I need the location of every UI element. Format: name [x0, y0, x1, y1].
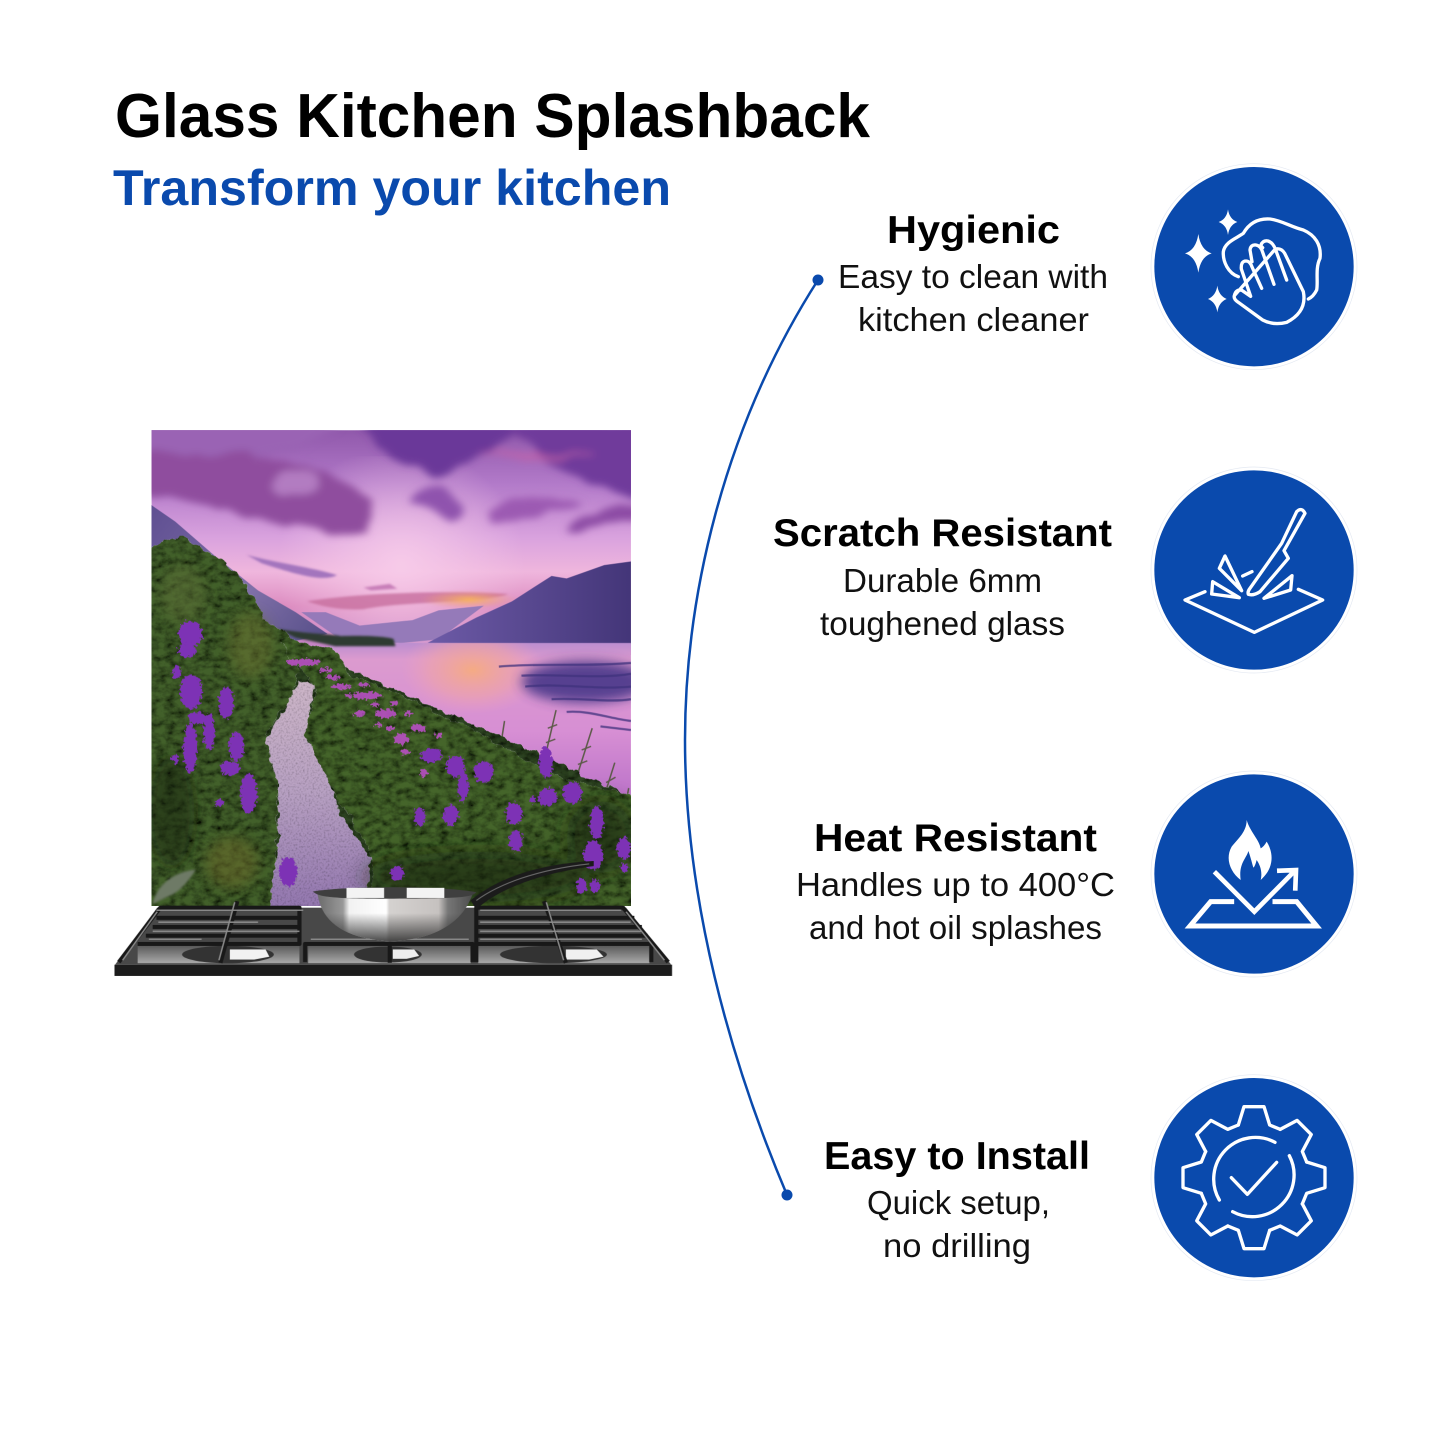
small pink flowers along the bank: [286, 659, 442, 778]
feature: Scratch Resistant: [773, 512, 1112, 642]
icon: gear with check mark: [1151, 1075, 1357, 1281]
foliage base: [266, 664, 628, 888]
large purple flower spikes: [172, 621, 631, 894]
heading: Scratch Resistant: [773, 512, 1112, 555]
foliage left of the path: [152, 536, 300, 906]
stems against the water: [501, 710, 630, 794]
description: [867, 1184, 1050, 1264]
frying pan: [313, 861, 594, 941]
grate highlights: [123, 902, 664, 960]
description: [838, 258, 1108, 338]
description: kitchen cleaner: [858, 301, 1089, 338]
description: Quick setup,: [867, 1184, 1050, 1221]
pale leaf bottom left: [153, 870, 196, 904]
description: Handles up to 400°C: [796, 866, 1115, 903]
shadows on right bank: [363, 801, 634, 902]
clouds: [134, 420, 649, 532]
subtitle: Transform your kitchen: [113, 160, 671, 216]
pan handle: [471, 861, 594, 910]
description: no drilling: [883, 1227, 1031, 1264]
thin horizon clouds: [247, 555, 521, 610]
splashback photo: lakeside sunset: [152, 430, 631, 906]
pan body: [318, 894, 473, 941]
description: [820, 562, 1065, 642]
gravel path: [266, 681, 371, 935]
feature: Easy to Install: [824, 1135, 1090, 1264]
hob surface: [115, 908, 671, 965]
front edge: [114, 965, 672, 976]
product image: splashback and gas hob: [114, 420, 672, 976]
rim reflections: [346, 888, 444, 898]
description: Easy to clean with: [838, 258, 1108, 295]
feature: Hygienic: [838, 209, 1108, 338]
icon: flame and arrow: [1151, 771, 1357, 977]
title: Glass Kitchen Splashback: [115, 82, 870, 151]
gas hob: [114, 901, 672, 976]
icon: cleaning hand: [1151, 164, 1357, 370]
mountains: [152, 505, 631, 645]
water ripples: [499, 663, 631, 730]
tree line on far shore: [277, 628, 395, 646]
olive and shadow patches: [152, 562, 276, 891]
heading: Hygienic: [887, 209, 1060, 252]
description: and hot oil splashes: [809, 909, 1102, 946]
icon: knife on glass: [1151, 467, 1357, 673]
foliage right of the path: [280, 637, 631, 906]
heading: Easy to Install: [824, 1135, 1090, 1178]
description: toughened glass: [820, 605, 1065, 642]
burner trays: [138, 946, 649, 963]
description: Durable 6mm: [843, 562, 1042, 599]
description: [796, 866, 1115, 946]
lake: [330, 643, 649, 812]
grates: [119, 901, 668, 963]
feature: Heat Resistant: [796, 817, 1115, 946]
pan rim: [313, 887, 476, 899]
heading: Heat Resistant: [814, 817, 1097, 860]
sky: [152, 430, 631, 655]
burners: [182, 946, 607, 963]
connecting curve with end dots: [685, 274, 824, 1200]
